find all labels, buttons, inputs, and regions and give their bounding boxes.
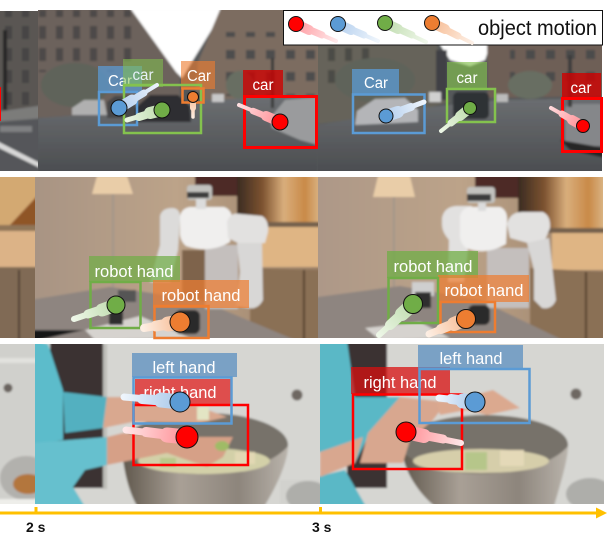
motion: blue car 3 s [379, 102, 424, 123]
motion: green car [127, 102, 170, 120]
motion: green car 3 s [441, 102, 476, 131]
photo: robot frame at 3 s [310, 172, 608, 342]
photo: robot frame at 2 s [30, 172, 325, 342]
timeline arrow [0, 507, 607, 518]
label: orange robot hand 3 s [438, 275, 529, 302]
box: orange hand [154, 306, 208, 338]
motion: red hand [126, 426, 198, 448]
photo: cooking strip left [0, 344, 35, 504]
label: orange Car [181, 61, 215, 89]
motion: green hand [74, 296, 125, 319]
label: green robot hand 3 s: robot hand [394, 257, 472, 276]
photo: cooking frame at 2 s [35, 344, 320, 504]
label: blue Car 3 s: Car [364, 75, 388, 92]
tick label: 3 s: 3 s [312, 519, 332, 535]
photo: street strip left [0, 11, 38, 171]
box: red hand [134, 405, 248, 465]
motion: green hand 3 s [379, 294, 422, 335]
label: green car 3 s: car [456, 70, 478, 87]
label: red right hand 3 s [351, 367, 450, 394]
box: red car [244, 96, 316, 148]
label: green robot hand: robot hand [94, 262, 174, 281]
motion: blue hand 3 s [439, 392, 485, 412]
motion: blue hand [124, 392, 190, 412]
label: blue Car 3 s [352, 69, 399, 94]
label: green robot hand 3 s [387, 251, 478, 278]
label: red right hand 3 s: right hand [364, 373, 436, 392]
box: red hand 3 s [353, 394, 462, 469]
box: green car 3 s [447, 89, 495, 122]
box: blue hand [134, 378, 232, 424]
label: red car 3 s: car [570, 80, 592, 97]
row 3 cooking frames [0, 340, 612, 511]
label: orange robot hand 3 s: robot hand [444, 281, 524, 300]
label: red right hand: right hand [144, 383, 216, 402]
motion: orange car [188, 92, 198, 117]
motion: blue car [111, 85, 157, 116]
label: orange robot hand [153, 280, 249, 308]
label: green car [123, 59, 163, 87]
box: green hand 3 s [388, 278, 438, 323]
marker: cropped red box [0, 87, 1, 121]
label: green car 3 s [447, 62, 487, 88]
box: blue car 3 s [353, 94, 424, 133]
photo: street frame at 3 s [318, 46, 602, 171]
box: red car 3 s [562, 98, 602, 152]
label: green robot hand [89, 256, 180, 282]
motion: red car [239, 105, 288, 130]
photo: robot strip left [0, 177, 35, 338]
label: blue left hand 3 s: left hand [440, 349, 502, 368]
box: blue hand 3 s [420, 369, 530, 423]
photo: cooking frame at 3 s [320, 344, 604, 504]
motion: orange hand 3 s [429, 310, 476, 334]
label: blue left hand [132, 353, 237, 377]
photo: street frame at 2 s [38, 10, 318, 171]
label: blue Car: Car [108, 73, 132, 90]
label: orange Car: Car [187, 68, 211, 85]
motion: orange hand [144, 312, 190, 332]
tick label: 2 s: 2 s [26, 519, 46, 535]
motion: red car 3 s [551, 108, 590, 132]
label: green car: car [132, 67, 154, 84]
motion: red hand 3 s [396, 422, 461, 443]
label: red right hand [135, 379, 231, 405]
label: blue Car [98, 66, 142, 92]
legend: object motion [284, 10, 602, 45]
label: blue left hand 3 s [418, 345, 523, 368]
box: orange hand 3 s [440, 302, 495, 332]
label: red car 3 s [562, 73, 601, 98]
box: green car [124, 85, 201, 133]
box: orange car [182, 88, 204, 102]
label: blue left hand: left hand [152, 358, 216, 377]
label: orange robot hand: robot hand [162, 286, 240, 305]
label: red car [243, 70, 283, 96]
legend: object motion: object motion [478, 17, 597, 40]
row 2 robot frames [0, 170, 608, 345]
box: green hand [90, 282, 140, 328]
row 1 street frames [0, 5, 610, 177]
label: red car: car [252, 77, 274, 94]
box: blue car [99, 92, 137, 125]
